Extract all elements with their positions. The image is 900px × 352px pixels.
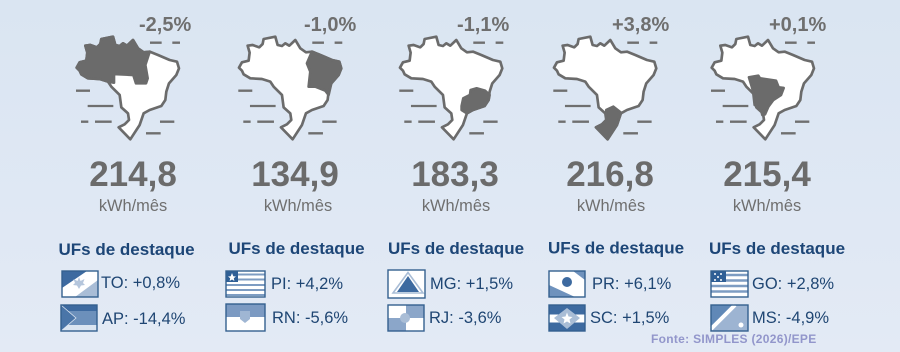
change percent: -2,5% [139, 14, 191, 36]
flag: PI [226, 271, 265, 297]
row: PI: PI: +4,2% [271, 275, 343, 293]
change percent: +3,8% [612, 14, 669, 36]
row: GO: GO: +2,8% [752, 275, 834, 293]
panel: Norte [58, 14, 195, 331]
heading: UFs de destaque [388, 239, 524, 258]
panel: Centro-Oeste [709, 14, 845, 331]
heading: UFs de destaque [58, 240, 195, 259]
heading: UFs de destaque [228, 239, 365, 258]
unit: kWh/mês [99, 197, 167, 215]
flag: TO [62, 271, 98, 297]
change percent: +0,1% [769, 14, 826, 36]
unit: kWh/mês [264, 197, 332, 215]
heading: UFs de destaque [709, 239, 845, 258]
row: AP: AP: -14,4% [102, 310, 186, 328]
source: Fonte: SIMPLES (2026)/EPE [651, 332, 817, 346]
flag: RJ [388, 305, 424, 331]
panel: Sul [548, 14, 684, 331]
unit: kWh/mês [422, 197, 490, 215]
value: 215,4 [723, 155, 811, 194]
map: Nordeste highlighted [238, 37, 342, 139]
flag: MS [711, 305, 748, 331]
heading: UFs de destaque [548, 238, 684, 258]
value: 216,8 [566, 155, 654, 194]
change percent: -1,1% [457, 14, 509, 36]
flag: MG [388, 270, 425, 298]
row: RJ: RJ: -3,6% [429, 309, 502, 327]
map: Sudeste highlighted [399, 37, 503, 139]
flag: GO [711, 271, 748, 297]
value: 134,9 [251, 155, 339, 194]
flag: AP [61, 305, 97, 331]
unit: kWh/mês [733, 197, 801, 215]
flag: SC [549, 305, 585, 331]
row: MS: MS: -4,9% [752, 309, 829, 327]
flag: RN [226, 304, 265, 331]
row: SC: SC: +1,5% [590, 309, 670, 327]
value: 214,8 [89, 155, 177, 194]
row: TO: TO: +0,8% [101, 274, 180, 292]
flag: PR [549, 271, 585, 297]
row: RN: RN: -5,6% [272, 309, 348, 327]
unit: kWh/mês [577, 197, 645, 215]
panel: Nordeste [226, 14, 365, 331]
map: Centro-Oeste highlighted [711, 37, 815, 139]
change percent: -1,0% [304, 14, 356, 36]
map: Sul highlighted [553, 37, 657, 139]
map: Norte highlighted [76, 37, 180, 139]
value: 183,3 [411, 155, 499, 194]
panel: Sudeste [388, 14, 524, 331]
row: MG: MG: +1,5% [430, 275, 513, 293]
row: PR: PR: +6,1% [592, 275, 672, 293]
